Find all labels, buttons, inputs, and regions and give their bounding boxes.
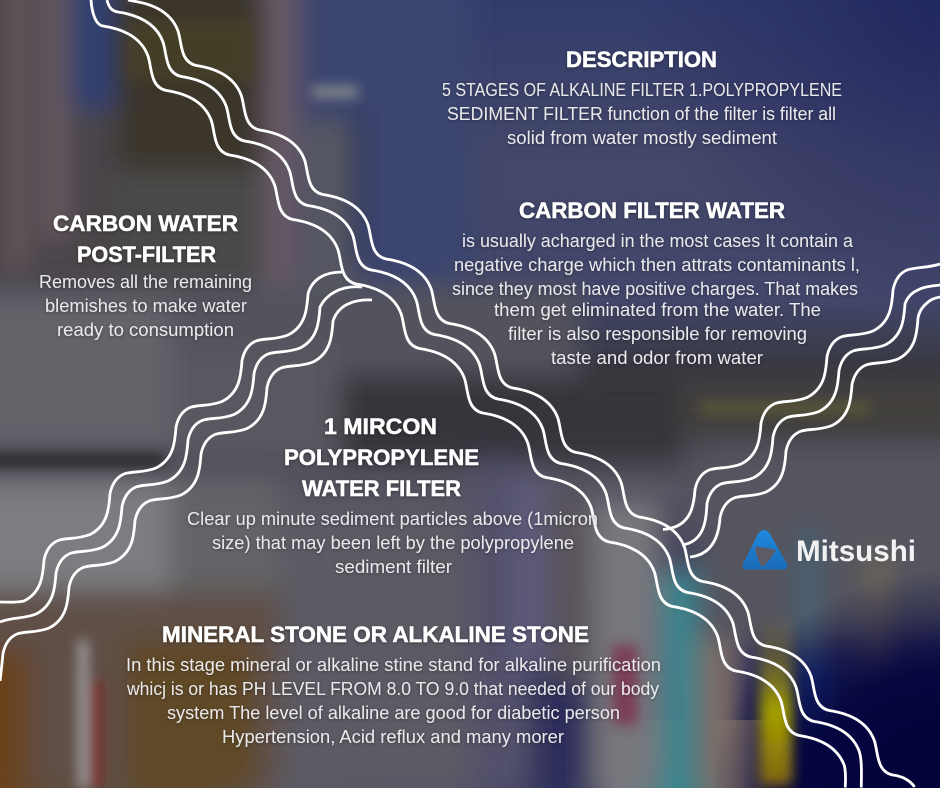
body: carbon filter water: taste and odor from water	[551, 348, 763, 368]
body: description	[442, 80, 842, 148]
body: 1 micron polypropylene water filter: size) that may been left by the polypropylene	[212, 533, 574, 553]
body: carbon filter water: since they most have positive charges. That makes	[452, 279, 858, 299]
body: carbon water post-filter: Removes all the remaining	[39, 272, 252, 292]
text block: carbon water post-filter	[39, 211, 252, 340]
body: description: 5 STAGES OF ALKALINE FILTER 1.POLYPROPYLENE	[442, 80, 842, 100]
body: description: solid from water mostly sediment	[507, 128, 777, 148]
logo: Mitsushi	[743, 530, 916, 570]
body: 1 micron polypropylene water filter	[187, 509, 598, 577]
wave lines: right edge to lower-right junction	[663, 264, 940, 557]
body: 1 micron polypropylene water filter: sediment filter	[335, 557, 452, 577]
heading: 1 micron polypropylene water filter: 1 MIRCON	[324, 414, 437, 439]
heading: carbon filter water: CARBON FILTER WATER	[519, 198, 785, 223]
heading: description: DESCRIPTION	[566, 47, 717, 72]
body: carbon filter water	[452, 231, 860, 368]
heading: carbon water post-filter	[53, 211, 238, 267]
heading: mineral stone or alkaline stone: MINERAL STONE OR ALKALINE STONE	[162, 622, 589, 647]
heading: carbon water post-filter: POST-FILTER	[77, 242, 216, 267]
body: mineral stone or alkaline stone: system The level of alkaline are good for diabetic person	[167, 703, 620, 723]
body: mineral stone or alkaline stone	[126, 655, 661, 747]
body: 1 micron polypropylene water filter: Clear up minute sediment particles above (1micron	[187, 509, 598, 529]
body: carbon filter water: filter is also responsible for removing	[508, 324, 807, 344]
text block: carbon filter water	[452, 198, 860, 368]
logo wordmark: Mitsushi	[796, 535, 916, 568]
wave lines: centre junction to bottom-left edge	[0, 272, 372, 681]
body: mineral stone or alkaline stone: whicj is or has PH LEVEL FROM 8.0 TO 9.0 that needed of our body	[126, 679, 659, 699]
heading: 1 micron polypropylene water filter: POLYPROPYLENE	[284, 445, 479, 470]
body: mineral stone or alkaline stone: Hypertension, Acid reflux and many morer	[222, 727, 564, 747]
heading: 1 micron polypropylene water filter: WATER FILTER	[302, 476, 461, 501]
text block: description	[442, 47, 842, 148]
body: carbon water post-filter: ready to consumption	[57, 320, 234, 340]
body: carbon water post-filter: blemishes to make water	[45, 296, 247, 316]
body: carbon water post-filter	[39, 272, 252, 340]
body: mineral stone or alkaline stone: In this stage mineral or alkaline stine stand for alkaline purification	[126, 655, 661, 675]
body: carbon filter water: them get eliminated from the water. The	[494, 300, 821, 320]
icon: blue triangle	[743, 530, 787, 570]
body: description: SEDIMENT FILTER function of the filter is filter all	[447, 104, 836, 124]
text block: mineral stone or alkaline stone	[126, 622, 661, 747]
body: carbon filter water: is usually acharged in the most cases It contain a	[462, 231, 854, 251]
heading: carbon water post-filter: CARBON WATER	[53, 211, 238, 236]
body: carbon filter water: negative charge which then attrats contaminants l,	[454, 255, 860, 275]
text block: 1 micron polypropylene water filter	[187, 414, 598, 577]
heading: 1 micron polypropylene water filter	[284, 414, 479, 501]
